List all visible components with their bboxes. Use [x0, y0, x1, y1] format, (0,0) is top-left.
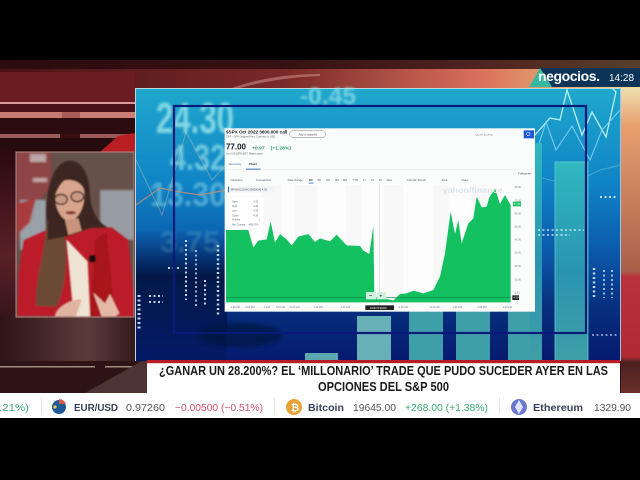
quote: Bitcoin [308, 403, 488, 414]
data tooltip: Volume [232, 219, 241, 222]
y axis labels: 5.00 [515, 291, 520, 294]
x axis labels: 2:30 PM [477, 306, 487, 309]
y axis labels: 65.00 [515, 212, 521, 215]
chart toolbar: Draw [462, 178, 469, 182]
x axis labels [231, 306, 512, 309]
x axis labels: 3:00 PM [341, 306, 350, 309]
quote: Ethereum [533, 403, 631, 414]
icon: bitcoin [286, 399, 302, 415]
panel: blue market backdrop [135, 83, 621, 361]
chart toolbar: 5Y [379, 178, 383, 182]
data tooltip [229, 197, 264, 228]
big glowing numbers: 4.32 [170, 137, 226, 178]
y axis labels [515, 186, 521, 294]
quote: EUR/USD: EUR/USD [74, 403, 118, 414]
quote: EUR/USD [74, 403, 263, 414]
search box: Quote Lookup [475, 133, 494, 137]
blouse [67, 240, 90, 317]
chart toolbar: 3M [335, 178, 340, 182]
panel: stock quote card: +0.97 [252, 145, 265, 151]
headline banner [147, 360, 620, 394]
big glowing numbers: 3.75 [160, 226, 220, 259]
zoom controls: + [379, 293, 382, 299]
data tooltip: 4.30 [253, 214, 259, 217]
y axis labels: 55.00 [515, 225, 521, 228]
logo: negocios clock [529, 68, 640, 87]
quote: Bitcoin: 19645.00 [353, 403, 396, 414]
city lights [139, 197, 618, 335]
data tooltip: 4.30 [253, 210, 259, 213]
chart toolbar: 6M [343, 178, 348, 182]
chart toolbar: Fullscreen [518, 172, 531, 176]
navy frame [174, 106, 586, 333]
watchlist button: Add to watchlist [299, 132, 318, 136]
x axis labels: 4 PM [264, 306, 270, 309]
y axis labels: 75.00 [515, 199, 521, 202]
price: 77.00 [226, 142, 247, 151]
studio background [0, 60, 640, 393]
hair back [47, 161, 110, 250]
zoom controls: − [369, 293, 373, 299]
chart toolbar: YTD [352, 178, 358, 182]
x axis labels: 4:00 PM [503, 306, 512, 309]
price tags [512, 202, 521, 300]
chart toolbar: 1D [309, 178, 313, 182]
headline banner: OPCIONES DEL S&P 500 [318, 379, 449, 394]
quote: Ethereum: 1329.90 [594, 403, 631, 414]
watchlist button [290, 131, 325, 138]
x axis labels: 2:30 PM [231, 306, 240, 309]
x axis labels: 11:00 AM [289, 306, 300, 309]
y axis labels: 25.00 [515, 265, 521, 268]
big glowing numbers: 13.30 [150, 176, 226, 214]
chart toolbar: Max [387, 178, 393, 182]
chart toolbar: 1M [326, 178, 331, 182]
panel: stock quote card: Chart [249, 162, 257, 166]
teal bars [305, 143, 588, 361]
big glowing numbers [150, 83, 356, 259]
quote: Bitcoin: +268.00 (+1.38%) [405, 403, 488, 414]
panel: stock quote card: (+1.28%) [271, 145, 291, 151]
series label: SPXW221014C03600000 4.30 [231, 188, 268, 192]
logo: negocios clock: negocios. [538, 68, 600, 84]
chart toolbar: 2Y [371, 178, 375, 182]
tabs: Summary [229, 162, 242, 166]
data tooltip: 4.30 [253, 205, 259, 208]
data tooltip: 1 [258, 219, 260, 222]
x axis labels: 11:30 AM [429, 306, 440, 309]
market ticker [0, 393, 640, 418]
icon: bitcoin: ₿ [291, 402, 299, 414]
crosshair date tag: 10/13 9:30AM [370, 306, 387, 310]
chart toolbar [230, 172, 531, 182]
glasses [55, 194, 67, 204]
red jacket [17, 227, 134, 317]
panel: stock quote card [225, 128, 535, 312]
panel: presenter video [16, 152, 134, 317]
data tooltip: Open [232, 200, 239, 203]
chart toolbar: 5D [317, 178, 321, 182]
panel: stock quote card: OPR - OPR Delayed Price. Currency in USD [226, 136, 275, 139]
x axis labels: 9:30 AM [276, 306, 285, 309]
big glowing numbers: 24.30 [156, 94, 234, 143]
studio map behind presenter [16, 152, 134, 250]
logo: negocios clock: 14:28 [609, 72, 634, 84]
x axis labels: 9:30 AM [399, 306, 408, 309]
quote heading: $SPX Oct 2022 3600.000 call [226, 130, 287, 135]
crosshair date tag [365, 305, 394, 310]
y axis labels: 35.00 [515, 251, 521, 254]
chart toolbar: Date Range [288, 178, 303, 182]
y axis labels: 45.00 [515, 238, 521, 241]
chart toolbar: 1Y [363, 178, 367, 182]
data tooltip: Low [232, 210, 237, 213]
x axis labels: 1:30 PM [313, 306, 323, 309]
yahoo finance watermark: yahoo/finance [443, 185, 503, 195]
data tooltip: 4.30 [253, 200, 259, 203]
data tooltip: Net Change [232, 223, 246, 226]
quote: EUR/USD: 0.97260 [126, 403, 165, 414]
long hair strand [36, 213, 66, 307]
microphone [89, 255, 96, 262]
icon: EUR USD flag [52, 399, 66, 414]
y axis labels: 85.00 [515, 186, 521, 189]
quote: Bitcoin: Bitcoin [308, 403, 344, 414]
search box [475, 130, 534, 138]
area chart [226, 183, 521, 310]
mouth [65, 211, 76, 214]
hands [55, 299, 82, 317]
series label [228, 187, 275, 192]
data tooltip: Close [232, 214, 239, 217]
line chart strokes [136, 88, 621, 215]
chart toolbar: Area [441, 178, 448, 182]
hair front [50, 171, 75, 197]
y axis labels: 15.00 [515, 278, 521, 281]
zoom controls [366, 292, 386, 299]
data tooltip: 469.57% [249, 223, 259, 226]
big glowing numbers: -0.45 [300, 83, 356, 110]
panel: stock quote card: As of 03:02PM BST. Market open. [226, 153, 264, 156]
chart toolbar: Indicators [230, 178, 243, 182]
chart toolbar: Comparison [256, 178, 272, 182]
quote: EUR/USD: −0.00500 (−0.51%) [175, 403, 263, 414]
data tooltip: High [232, 205, 238, 208]
price tags: 4.30 [513, 296, 519, 300]
chart toolbar: Interval: 30 min [407, 178, 426, 182]
quote: Ethereum: Ethereum [533, 403, 583, 414]
icon: ethereum [511, 399, 527, 415]
face [55, 180, 84, 222]
price tags: 77.00 [514, 202, 521, 206]
x axis labels: 1:00 PM [453, 306, 462, 309]
x axis labels: 3:00 PM [245, 306, 255, 309]
